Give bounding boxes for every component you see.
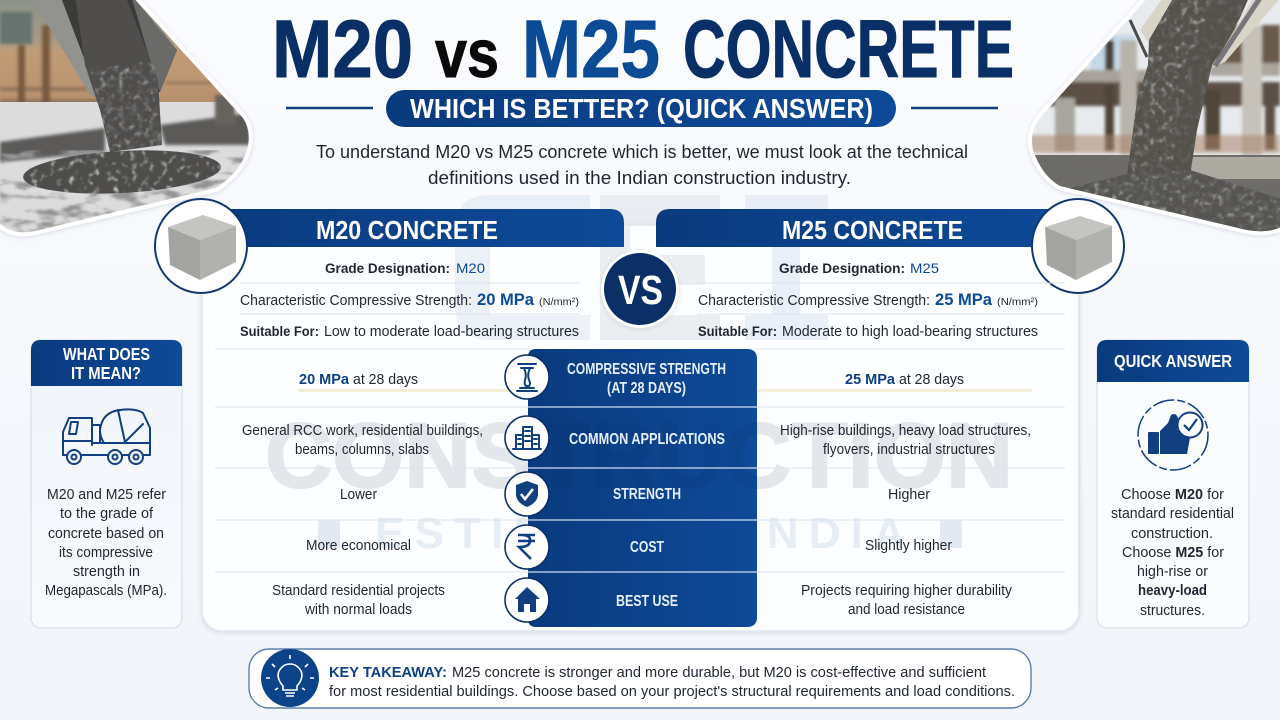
panel: M25 header [656, 209, 1075, 247]
title: M20 [272, 4, 413, 95]
text: quick answer: construction. [1131, 526, 1213, 542]
intro text: To understand M20 vs M25 concrete which is better, we must look at the technical [316, 141, 968, 162]
M25 column values: and load resistance [848, 602, 965, 618]
text: quick answer: Choose M20 for [1121, 487, 1224, 503]
M20 column values: General RCC work, residential buildings, [242, 423, 483, 439]
M25 column values: Higher [888, 487, 930, 503]
title [272, 4, 1014, 95]
watermark: ESTIMATOR INDIA [375, 509, 905, 558]
photo: concrete pouring left [0, 0, 250, 235]
text: quick answer: standard residential [1111, 506, 1234, 522]
M20 column values: Lower [340, 487, 377, 503]
text: meaning: its compressive [59, 545, 153, 561]
M20 column values: at 28 days [353, 372, 418, 388]
VS badge: VS [618, 267, 663, 313]
text: key takeaway [329, 664, 1015, 700]
icon: common applications [505, 416, 549, 460]
text: meaning: strength in [73, 564, 140, 580]
icon: cost rupee [505, 525, 549, 569]
center criteria column: COST [630, 539, 664, 556]
photo: concrete pouring right [1030, 0, 1280, 240]
M20 definitions: Suitable For: [240, 323, 319, 339]
M20 definitions: 20 MPa [477, 291, 535, 309]
M25 column values: at 28 days [899, 372, 964, 388]
M20 definitions: Grade Designation: [325, 261, 450, 276]
text: meaning: to the grade of [60, 506, 154, 522]
M25 column values [780, 372, 1031, 618]
M20 definitions: Characteristic Compressive Strength: [240, 292, 472, 309]
text: quick answer: high-rise or [1137, 564, 1208, 580]
M25 column values: 25 MPa [845, 372, 896, 388]
title: M25 [522, 4, 660, 95]
M20 definitions: Low to moderate load-bearing structures [324, 323, 579, 340]
text: key takeaway: M25 concrete is stronger and more durable, but M20 is cost-effective and sufficient [452, 664, 987, 681]
M25 definitions [697, 260, 1065, 340]
panel: M20 header: M20 CONCRETE [316, 215, 498, 245]
M25 column values: Slightly higher [865, 538, 952, 554]
text: quick answer: structures. [1140, 603, 1205, 619]
center criteria column: COMPRESSIVE STRENGTH [567, 361, 726, 378]
M20 column values: Standard residential projects [272, 583, 445, 599]
row dividers [215, 349, 1065, 572]
M20 definitions [240, 260, 580, 340]
intro text [316, 141, 968, 188]
M25 definitions: Moderate to high load-bearing structures [782, 323, 1038, 340]
M25 definitions: (N/mm²) [997, 297, 1038, 308]
panel: quick answer: QUICK ANSWER [1114, 351, 1232, 371]
M25 column values: Projects requiring higher durability [801, 583, 1013, 599]
icon: M25 concrete cube [1032, 199, 1124, 293]
text: meaning: M20 and M25 refer [47, 487, 166, 503]
center criteria column: CONSTRUCTION [265, 405, 1013, 507]
M20 column values: beams, columns, slabs [295, 442, 429, 458]
watermark: CONSTRUCTION [265, 405, 1013, 507]
VS badge [601, 250, 679, 328]
icon: M20 concrete cube [155, 199, 247, 293]
intro text: definitions used in the Indian construction industry. [428, 167, 851, 188]
center criteria column: BEST USE [616, 593, 678, 610]
M20 column values: More economical [306, 538, 411, 554]
text: meaning: Megapascals (MPa). [45, 583, 167, 599]
M25 definitions: Characteristic Compressive Strength: [698, 292, 930, 309]
M20 column values [242, 372, 483, 618]
title: vs [435, 16, 499, 92]
panel: M20 header [205, 209, 624, 247]
text: key takeaway: KEY TAKEAWAY: [329, 664, 447, 681]
M25 definitions: Suitable For: [698, 323, 777, 339]
text: quick answer: Choose M25 for [1122, 545, 1224, 561]
panel: what does it mean [31, 340, 182, 628]
subtitle pill: WHICH IS BETTER? (QUICK ANSWER) [410, 93, 873, 124]
panel: what does it mean: WHAT DOES [63, 344, 150, 364]
icon: thumbs up with check [1138, 400, 1208, 470]
M20 definitions: (N/mm²) [539, 297, 579, 308]
M25 definitions: M25 [910, 260, 939, 276]
watermark [265, 195, 1032, 558]
M25 column values: flyovers, industrial structures [823, 442, 995, 458]
icon: compressive strength [505, 355, 549, 399]
icon: best use house [505, 578, 549, 622]
M20 column values: with normal loads [304, 602, 412, 618]
text: quick answer: heavy-load [1138, 583, 1207, 599]
icon: strength shield [505, 472, 549, 516]
text: meaning: concrete based on [48, 526, 164, 542]
key takeaway banner [249, 649, 1031, 708]
main comparison panel [202, 225, 1079, 631]
panel: what does it mean: IT MEAN? [71, 363, 141, 383]
center criteria column [528, 349, 757, 627]
center criteria column: (AT 28 DAYS) [607, 380, 686, 397]
panel: quick answer [1097, 340, 1249, 628]
subtitle pill [286, 90, 998, 127]
icon: light bulb [261, 649, 319, 707]
icon: concrete mixer truck [63, 409, 150, 464]
M20 definitions: M20 [456, 260, 485, 276]
M20 column values: 20 MPa [299, 372, 350, 388]
panel: M25 header: M25 CONCRETE [782, 215, 963, 245]
text: meaning [45, 487, 167, 599]
M25 definitions: Grade Designation: [779, 261, 905, 276]
center criteria column: COMMON APPLICATIONS [569, 431, 725, 448]
text: quick answer [1111, 487, 1234, 619]
title: CONCRETE [683, 4, 1014, 95]
M25 column values: High-rise buildings, heavy load structures, [780, 423, 1031, 439]
M25 definitions: 25 MPa [935, 291, 993, 309]
center criteria column: STRENGTH [613, 486, 681, 503]
text: key takeaway: for most residential buildings. Choose based on your project's structural requirements and load conditions. [329, 683, 1015, 700]
